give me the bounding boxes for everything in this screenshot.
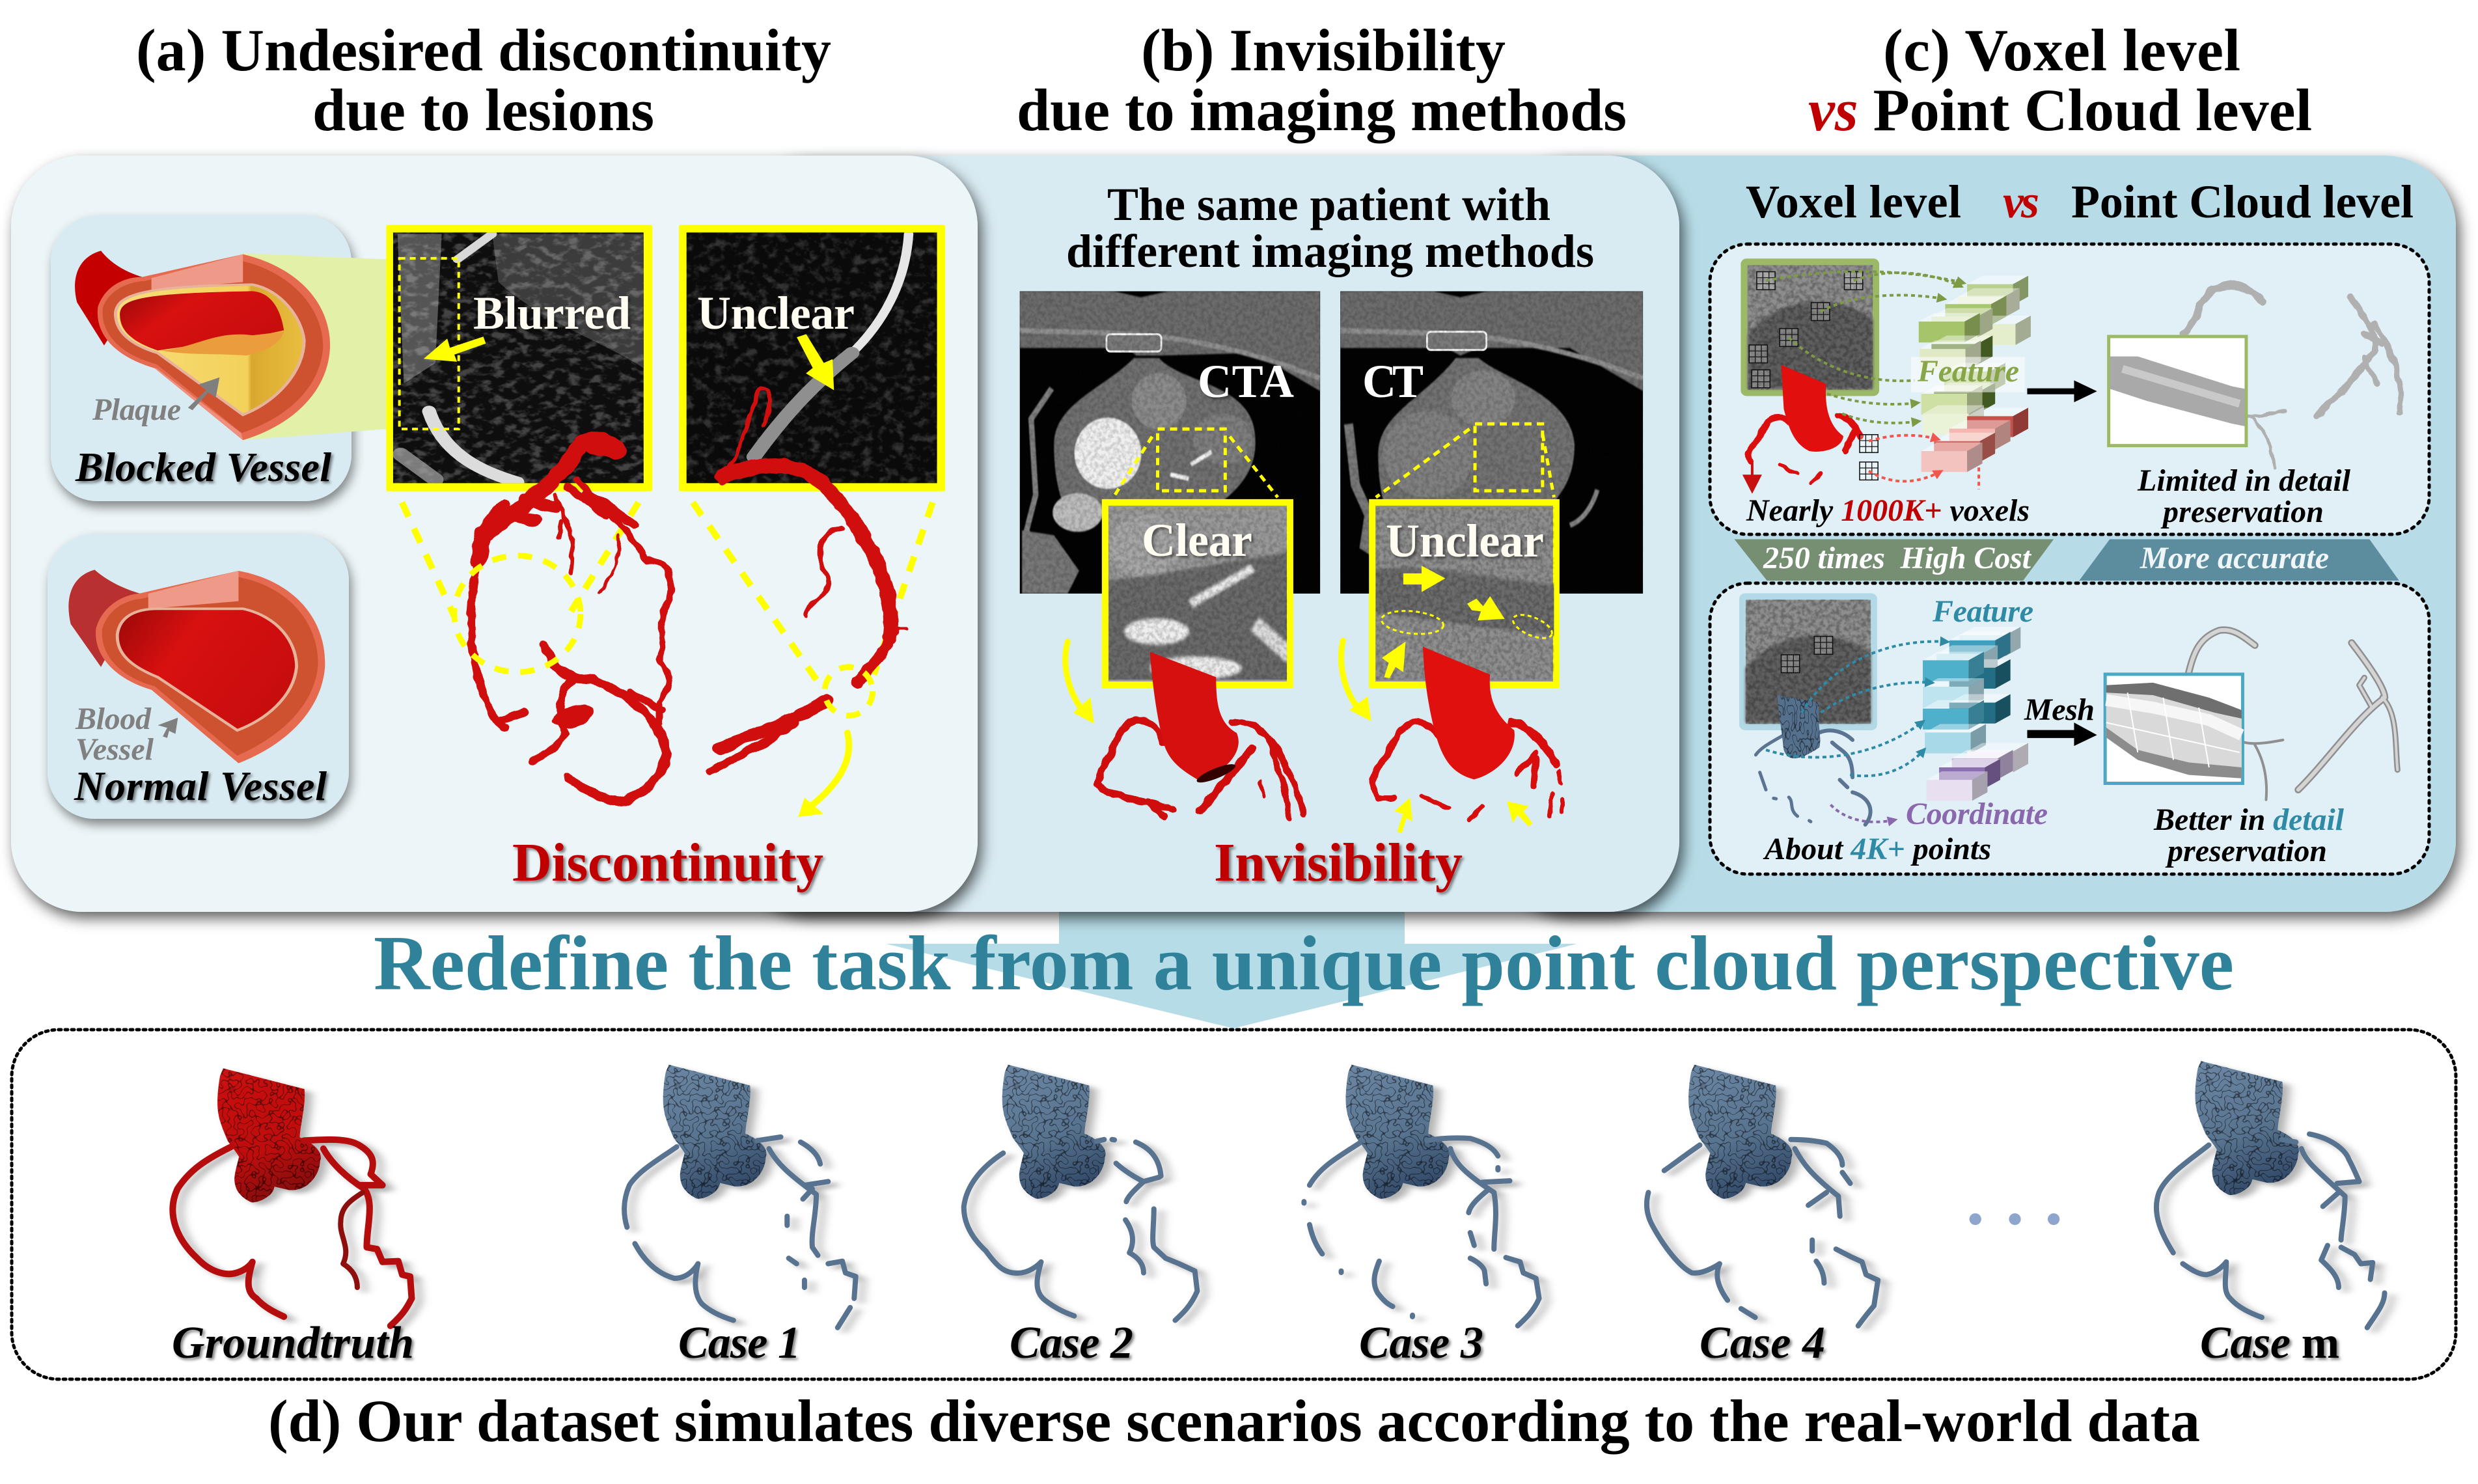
dashed box: dataset cases xyxy=(12,1030,2456,1379)
scan: point cloud input xyxy=(1742,596,1874,727)
label: feature green: Feature xyxy=(1917,354,2019,389)
title: panel b heading xyxy=(1017,17,1627,143)
label: limited detail: Limited in detail xyxy=(2137,463,2351,498)
thin vessels: voxel result xyxy=(2184,285,2401,469)
feature stack: teal xyxy=(1923,627,2020,754)
arrow: curved toward discontinuity xyxy=(798,733,849,817)
label: invisibility: Invisibility xyxy=(1214,832,1463,893)
arrow: to voxel result xyxy=(2027,380,2097,402)
illustration: panel c pipelines xyxy=(1735,262,2401,825)
arrow: points to blurred area xyxy=(426,338,484,361)
label: limited detail: preservation xyxy=(2160,495,2324,529)
arrows: teal dotted xyxy=(1766,641,1948,776)
dashed zoom lines: left xyxy=(402,502,639,616)
title: panel c heading: vs Point Cloud level xyxy=(1808,77,2312,143)
arrow: mesh xyxy=(2027,722,2097,746)
label: CT: CT xyxy=(1362,355,1424,407)
label: case m: Case m xyxy=(2200,1318,2339,1368)
dashed zoom: unclear xyxy=(1376,424,1554,497)
label: high cost banner text: 250 times High Cost xyxy=(1763,541,2032,575)
arrow: purple dotted xyxy=(1830,804,1896,822)
label: better detail xyxy=(2153,803,2345,868)
feature stack: purple xyxy=(1927,743,2028,801)
label: case 3: Case 3 xyxy=(1359,1318,1483,1368)
title: panel c heading xyxy=(1808,17,2312,143)
label: mesh: Mesh xyxy=(2024,693,2095,727)
heading: voxel vs point cloud: vs xyxy=(2003,176,2039,228)
title: panel c heading: (c) Voxel level xyxy=(1883,17,2240,83)
label: voxel count: Nearly 1000K+ voxels xyxy=(1746,493,2030,528)
card: blocked vessel xyxy=(51,215,351,501)
title: panel b heading: (b) Invisibility xyxy=(1141,17,1506,83)
dashed box: point cloud pipeline xyxy=(1710,583,2429,874)
model: red vessel voxels xyxy=(1744,365,1860,491)
heading: same patient text: different imaging methods xyxy=(1066,225,1594,277)
label: blocked vessel: Blocked Vessel xyxy=(75,444,331,490)
dashed circle: gap in left tree xyxy=(454,556,581,672)
detail box: mesh vessel xyxy=(2105,674,2242,783)
illustration: panel b scans and models xyxy=(1020,291,1643,833)
scan: CTA slice xyxy=(1020,291,1320,594)
panel: c voxel versus point cloud xyxy=(1497,156,2456,912)
label: case 4: Case 4 xyxy=(1700,1318,1825,1368)
dots: ellipsis between cases xyxy=(1970,1213,2059,1225)
heading: same patient text xyxy=(1066,178,1594,277)
scan: blurred CT xyxy=(386,225,652,491)
panel: b invisibility background xyxy=(736,156,1679,912)
title: panel b heading: due to imaging methods xyxy=(1017,77,1627,143)
feature stack: green xyxy=(1919,276,2031,435)
label: more accurate banner text: More accurate xyxy=(2140,541,2329,575)
scan: voxel input xyxy=(1744,262,1876,392)
big arrow: from panels down to dataset xyxy=(886,898,1577,1028)
label: case 2: Case 2 xyxy=(1010,1318,1133,1368)
label: better detail: preservation xyxy=(2165,834,2327,868)
model: incomplete CT vessels xyxy=(1371,647,1562,819)
vessel tree: right coronary xyxy=(710,389,907,771)
title: panel a heading: (a) Undesired discontinuity xyxy=(136,17,831,83)
label: unclear in scan: Unclear xyxy=(697,287,855,339)
panel: a discontinuity background xyxy=(11,156,978,912)
detail box: voxel vessel xyxy=(2109,337,2246,446)
feature stack: red xyxy=(1921,407,2028,472)
highlight: feature label backing xyxy=(1911,357,2025,392)
banner: more accurate xyxy=(2079,539,2399,581)
label: normal vessel: Normal Vessel xyxy=(74,763,327,809)
label: feature teal: Feature xyxy=(1932,594,2033,629)
label: groundtruth caption: Groundtruth xyxy=(172,1318,414,1368)
icon: blood vessel pointer arrow xyxy=(158,718,178,738)
icon: blocked vessel cross section xyxy=(75,251,330,440)
illustration: panel a vessels and scans xyxy=(68,225,945,817)
title: panel a heading: due to lesions xyxy=(312,77,654,143)
icons: point cloud grids xyxy=(1781,637,1833,673)
arrows: green dotted xyxy=(1766,271,1964,423)
dashed circle: gap in right tree xyxy=(825,667,873,715)
label: blood vessel xyxy=(75,702,154,767)
label: case 1: Case 1 xyxy=(678,1318,801,1368)
heading: voxel vs point cloud: Voxel level xyxy=(1746,176,1961,228)
label: plaque: Plaque xyxy=(92,392,181,427)
arrow: missing branch right xyxy=(1507,801,1532,827)
label: unclear in zoom box: Unclear xyxy=(1386,515,1544,567)
arrows: red dotted xyxy=(1869,435,1979,489)
icons: red voxel grids xyxy=(1860,435,1878,480)
zoom box: unclear xyxy=(1367,502,1563,685)
model: point cloud vessels xyxy=(1755,695,1871,825)
title: panel a heading xyxy=(136,17,831,143)
label: limited detail xyxy=(2137,463,2351,529)
banner: high cost xyxy=(1735,539,2054,581)
model: case 1 xyxy=(624,1065,856,1328)
dashed box: blurred region xyxy=(400,258,459,429)
callout band: vessel to scan xyxy=(243,253,386,440)
label: better detail: Better in detail xyxy=(2153,803,2345,837)
card: normal vessel xyxy=(48,534,349,819)
model: case 4 xyxy=(1647,1065,1878,1326)
icon: plaque pointer arrow xyxy=(188,378,219,410)
icon: normal vessel cross section xyxy=(68,570,325,763)
model: case m xyxy=(2156,1061,2384,1328)
label: point count: About 4K+ points xyxy=(1763,832,1991,866)
zoom box: clear xyxy=(1099,502,1296,693)
arrow: missing branch left xyxy=(1394,798,1412,833)
group: first dataset models xyxy=(172,1065,1197,1328)
label: blood vessel: Blood xyxy=(75,702,152,736)
dashed box: voxel pipeline xyxy=(1710,244,2429,534)
heading: voxel vs point cloud xyxy=(1746,176,2414,228)
label: blood vessel: Vessel xyxy=(76,732,154,767)
label: CTA: CTA xyxy=(1198,355,1294,407)
model: case 3 xyxy=(1304,1065,1539,1326)
label: coordinate: Coordinate xyxy=(1906,797,2048,831)
caption: panel d: (d) Our dataset simulates diverse scenarios according to the real-world data xyxy=(268,1388,2200,1454)
dashed zoom: clear xyxy=(1113,429,1278,497)
label: clear: Clear xyxy=(1142,514,1252,566)
model: complete CTA vessels xyxy=(1097,652,1303,819)
model: groundtruth xyxy=(172,1068,412,1326)
label: blurred: Blurred xyxy=(473,287,631,339)
dashed zoom lines: right xyxy=(693,502,933,690)
label: discontinuity: Discontinuity xyxy=(512,832,823,893)
thin vessels: mesh result xyxy=(2188,630,2397,800)
heading: voxel vs point cloud: Point Cloud level xyxy=(2071,176,2414,228)
slogan: redefine the task: Redefine the task from a unique point cloud perspective xyxy=(374,920,2234,1006)
group: later dataset models xyxy=(1304,1061,2384,1328)
scan: CT slice xyxy=(1340,291,1643,594)
vessel tree: left coronary xyxy=(471,439,671,801)
icons: voxel grids xyxy=(1749,271,1863,388)
scan: unclear CT xyxy=(679,225,945,491)
model: case 2 xyxy=(964,1065,1197,1321)
heading: same patient text: The same patient with xyxy=(1107,178,1550,230)
arrow: curved left to clear model xyxy=(1066,642,1094,724)
arrow: curved left to unclear model xyxy=(1341,640,1371,721)
arrow: points to unclear area xyxy=(798,335,833,389)
